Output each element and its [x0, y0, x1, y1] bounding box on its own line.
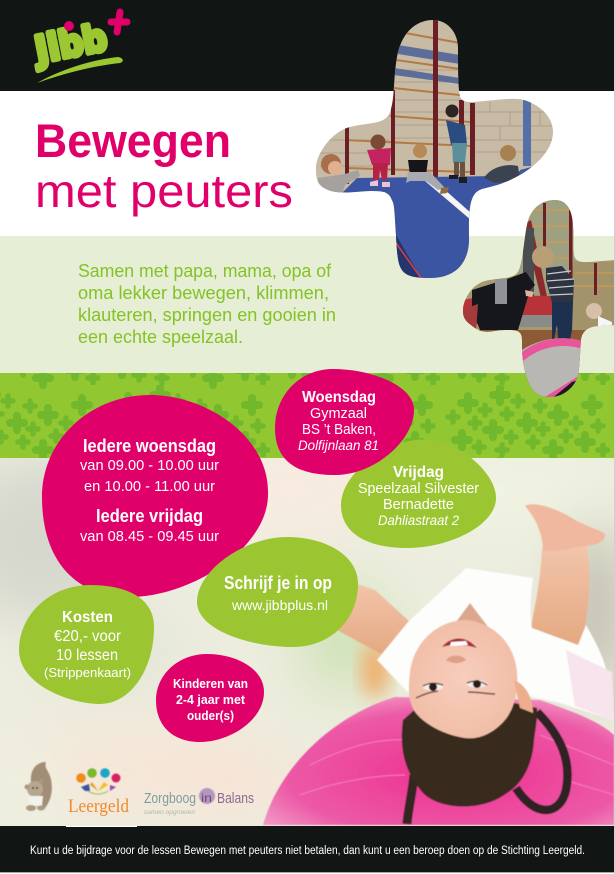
- child black shirt: [413, 144, 427, 158]
- face: [409, 620, 517, 738]
- bubble: Vrijdag location: Speelzaal Silvester: [358, 480, 479, 497]
- bubble: Kosten: (Strippenkaart): [44, 665, 131, 680]
- logo: Jibb+: Jibb: [29, 16, 110, 72]
- bubble: times: Iedere vrijdag: [96, 506, 203, 526]
- shirt: [377, 568, 613, 720]
- bubble: Kinderen: [156, 654, 264, 742]
- child blue shirt: [446, 104, 458, 118]
- toddler: [532, 246, 554, 268]
- logo plus: [111, 12, 127, 32]
- bubble: times: [42, 395, 268, 597]
- photo: toddler on gym ball: [460, 195, 615, 400]
- bubble: Woensdag location: Dolfijnlaan 81: [298, 437, 379, 453]
- bubble: times: van 08.45 - 09.45 uur: [80, 528, 219, 545]
- bubble: Vrijdag location: Bernadette: [383, 496, 454, 513]
- bubble: Kosten: 10 lessen: [56, 647, 118, 664]
- red mat: [463, 296, 552, 324]
- bubble: Woensdag location: Woensdag: [302, 389, 376, 406]
- logo swoosh: [37, 57, 123, 83]
- eyes: [423, 683, 443, 691]
- bubble: Kosten: Kosten: [62, 609, 113, 626]
- bubble: Woensdag location: [275, 369, 414, 475]
- logo: Zorgboog in Balans: Zorgboog: [144, 791, 196, 807]
- intro text: klauteren, springen en gooien in: [78, 305, 336, 325]
- logo: Leergeld: [68, 768, 129, 817]
- logo: squirrel and bear: [24, 762, 52, 811]
- adult in black: [472, 272, 535, 330]
- intro text: Samen met papa, mama, opa of: [78, 261, 332, 281]
- bubble: Vrijdag location: Vrijdag: [393, 464, 444, 481]
- nose: [446, 656, 466, 663]
- photo: girl on pink exercise ball: [0, 445, 615, 826]
- patterned green band: [0, 373, 615, 458]
- intro text: [78, 261, 336, 347]
- bubble: Kinderen: Kinderen van: [173, 676, 248, 691]
- bubble: Vrijdag location: Dahliastraat 2: [378, 512, 459, 528]
- arm right and hand: [530, 542, 589, 650]
- logo: Zorgboog in Balans: samen opgroeien: [144, 810, 196, 816]
- bubble: times: van 09.00 - 10.00 uur: [80, 457, 219, 474]
- braids: [516, 712, 568, 810]
- bubble: times: en 10.00 - 11.00 uur: [84, 478, 215, 495]
- light green intro band: [0, 236, 615, 373]
- bubble: Kinderen: 2-4 jaar met: [176, 692, 246, 707]
- bubble: Woensdag location: Gymzaal: [310, 405, 367, 422]
- title: [35, 114, 293, 217]
- bubble: times: Iedere woensdag: [83, 436, 216, 456]
- child pink: [370, 134, 386, 150]
- gym ball: [522, 338, 581, 397]
- child striped: [500, 145, 516, 161]
- bubble: Woensdag location: BS ’t Baken,: [302, 421, 376, 438]
- bubble: Schrijf je in op: www.jibbplus.nl: [231, 597, 328, 613]
- blue mat: [342, 168, 530, 278]
- bubble: Schrijf je in op: [197, 537, 358, 647]
- logo: Zorgboog in Balans: Balans: [217, 791, 254, 807]
- logo: Leergeld: Leergeld: [68, 796, 129, 817]
- bubble: Vrijdag location: [341, 440, 496, 548]
- small child right: [586, 303, 602, 319]
- hair: [402, 700, 537, 807]
- bubble: Kinderen: ouder(s): [187, 708, 234, 723]
- child left: [318, 170, 360, 192]
- footer band: [0, 826, 615, 873]
- logo: Zorgboog in Balans: [144, 788, 254, 816]
- title: Bewegen: [35, 114, 231, 167]
- bubble: Kosten: [19, 585, 154, 704]
- black header band: [0, 0, 615, 91]
- white title band: [0, 91, 615, 236]
- bubble: Kosten: €20,- voor: [54, 628, 121, 645]
- mouth: [442, 638, 477, 648]
- intro text: een echte speelzaal.: [78, 327, 243, 347]
- ball: [263, 697, 614, 825]
- neck: [456, 602, 488, 627]
- title: met peuters: [35, 165, 293, 217]
- logo i dot: [64, 21, 74, 31]
- logo: Zorgboog in Balans: in: [201, 791, 212, 805]
- bubble: Schrijf je in op: Schrijf je in op: [224, 573, 332, 593]
- arm left: [338, 584, 409, 654]
- intro text: oma lekker bewegen, klimmen,: [78, 283, 329, 303]
- photo: children on blue mat in gym: [310, 15, 560, 285]
